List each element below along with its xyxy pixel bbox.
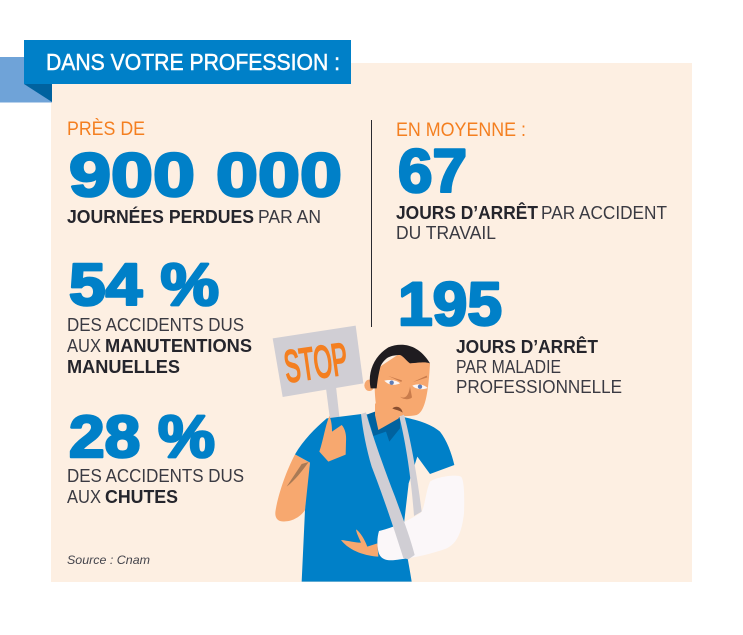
source: Source : Cnam bbox=[67, 553, 150, 567]
icon: blue shirt bbox=[295, 414, 454, 582]
stat: 900 000 lost days: PAR AN bbox=[258, 206, 321, 227]
stat: 67 days: 67 bbox=[398, 137, 467, 205]
stat: 28 % bbox=[67, 404, 244, 507]
stat: 54 % bbox=[67, 252, 252, 377]
banner: heading ribbon bbox=[0, 40, 351, 102]
icon: stop lettering: STOP bbox=[281, 333, 351, 392]
stat: 54 %: DES ACCIDENTS DUS bbox=[67, 314, 244, 335]
icon: arm shadow bbox=[287, 462, 309, 487]
stat: 900 000 lost days: PRÈS DE bbox=[67, 119, 145, 140]
divider bbox=[371, 120, 372, 327]
heading: DANS VOTRE PROFESSION : bbox=[46, 49, 340, 75]
icon: eyebrows, nose and mouth bbox=[388, 376, 427, 399]
stat: 195 days: PAR MALADIE bbox=[456, 356, 561, 377]
stat: 195 days: PROFESSIONNELLE bbox=[456, 376, 622, 397]
stat: 67 days: DU TRAVAIL bbox=[396, 222, 496, 243]
stat: 67 days: EN MOYENNE : bbox=[396, 120, 526, 141]
stat: 900 000 lost days: 900 000 bbox=[69, 141, 342, 209]
icon: cast bbox=[377, 476, 464, 560]
stat: 28 %: DES ACCIDENTS DUS bbox=[67, 465, 244, 486]
icon: sign board bbox=[273, 326, 363, 397]
icon: head bbox=[375, 353, 430, 416]
icon: sling strap rear bbox=[399, 415, 422, 516]
icon: sling strap front bbox=[361, 412, 415, 559]
icon: ear bbox=[364, 380, 374, 391]
stat: 195 days bbox=[398, 270, 622, 397]
stat: 67 days: JOURS D’ARRÊT bbox=[396, 202, 539, 223]
stat: 54 %: AUX bbox=[67, 335, 101, 356]
stat: 54 %: MANUTENTIONS bbox=[105, 335, 252, 356]
stat: 900 000 lost days bbox=[67, 119, 342, 227]
icon: eyes bbox=[384, 380, 400, 385]
icon: raised arm bbox=[275, 454, 310, 521]
panel: background bbox=[51, 63, 692, 582]
stat: 195 days: 195 bbox=[398, 270, 502, 338]
stat: 28 %: AUX bbox=[67, 486, 101, 507]
stat: 28 %: CHUTES bbox=[105, 486, 178, 507]
stat: 54 %: 54 % bbox=[69, 252, 219, 318]
icon: neck and collar bbox=[367, 412, 400, 442]
icon: lower hand bbox=[341, 529, 378, 557]
stat: 900 000 lost days: JOURNÉES PERDUES bbox=[67, 206, 254, 227]
icon: hair bbox=[370, 345, 430, 388]
icon: hand holding pole bbox=[319, 416, 346, 462]
icon: sign pole bbox=[326, 387, 341, 430]
stat: 54 %: MANUELLES bbox=[67, 356, 180, 377]
stat: 28 %: 28 % bbox=[69, 404, 215, 470]
stat: 67 days bbox=[396, 120, 667, 243]
stat: 67 days: PAR ACCIDENT bbox=[541, 202, 667, 223]
stat: 195 days: JOURS D’ARRÊT bbox=[456, 336, 599, 357]
illustration: injured worker with stop sign bbox=[273, 326, 464, 582]
